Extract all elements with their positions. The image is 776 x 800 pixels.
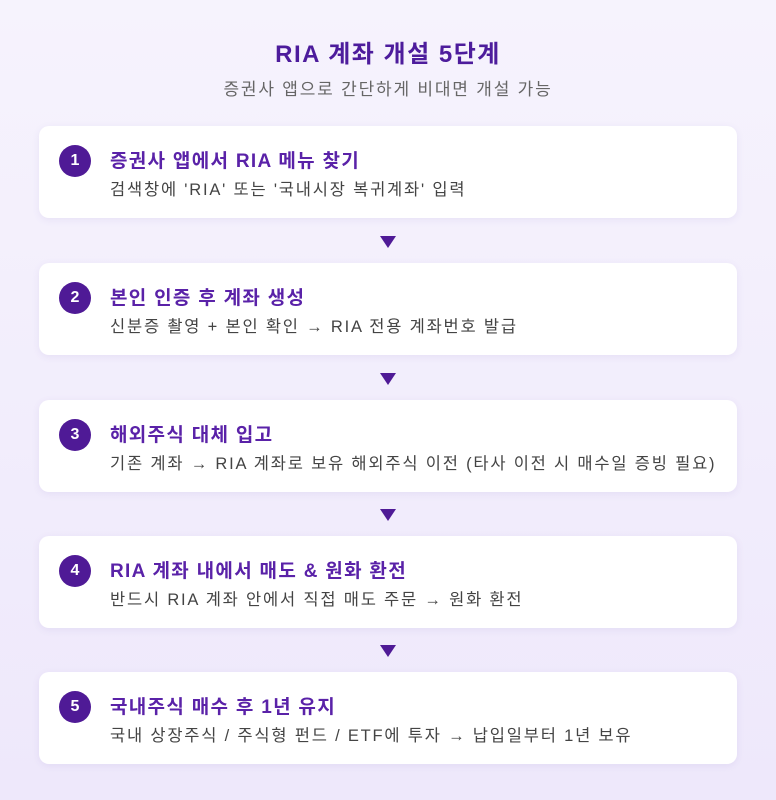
panel: step 5: 5 bbox=[71, 698, 79, 715]
subtitle: 증권사 앱으로 간단하게 비대면 개설 가능 bbox=[223, 80, 553, 99]
panel: step 2: 2 bbox=[71, 289, 79, 306]
panel: step 3: 3 bbox=[71, 426, 79, 443]
panel: step 3: 해외주식 대체 입고 bbox=[110, 425, 273, 446]
panel: step 2: 신분증 촬영 + 본인 확인 → RIA 전용 계좌번호 발급 bbox=[110, 318, 518, 336]
panel: step 3: 기존 계좌 → RIA 계좌로 보유 해외주식 이전 (타사 이전 시 매수일 증빙 필요) bbox=[110, 455, 716, 473]
panel: step 4: 반드시 RIA 계좌 안에서 직접 매도 주문 → 원화 환전 bbox=[110, 591, 523, 609]
panel: step 4 bbox=[39, 536, 737, 628]
arrow bbox=[380, 645, 396, 657]
panel: step 5: 국내주식 매수 후 1년 유지 bbox=[110, 697, 336, 718]
panel: step 1: 증권사 앱에서 RIA 메뉴 찾기 bbox=[110, 151, 360, 172]
panel: step 1 bbox=[39, 126, 737, 218]
panel: step 5: 국내 상장주식 / 주식형 펀드 / ETF에 투자 → 납입일부터 1년 보유 bbox=[110, 727, 632, 745]
arrow bbox=[380, 373, 396, 385]
panel: step 1: 1 bbox=[71, 152, 79, 169]
title: RIA 계좌 개설 5단계 bbox=[275, 41, 501, 68]
panel: step 4: RIA 계좌 내에서 매도 & 원화 환전 bbox=[110, 561, 407, 582]
panel: step 4: 4 bbox=[71, 562, 79, 579]
panel: step 2: 본인 인증 후 계좌 생성 bbox=[110, 288, 305, 309]
arrow bbox=[380, 236, 396, 248]
panel: step 2 bbox=[39, 263, 737, 355]
panel: step 1: 검색창에 'RIA' 또는 '국내시장 복귀계좌' 입력 bbox=[110, 181, 466, 199]
panel: step 5 bbox=[39, 672, 737, 764]
panel: step 3 bbox=[39, 400, 737, 492]
arrow bbox=[380, 509, 396, 521]
